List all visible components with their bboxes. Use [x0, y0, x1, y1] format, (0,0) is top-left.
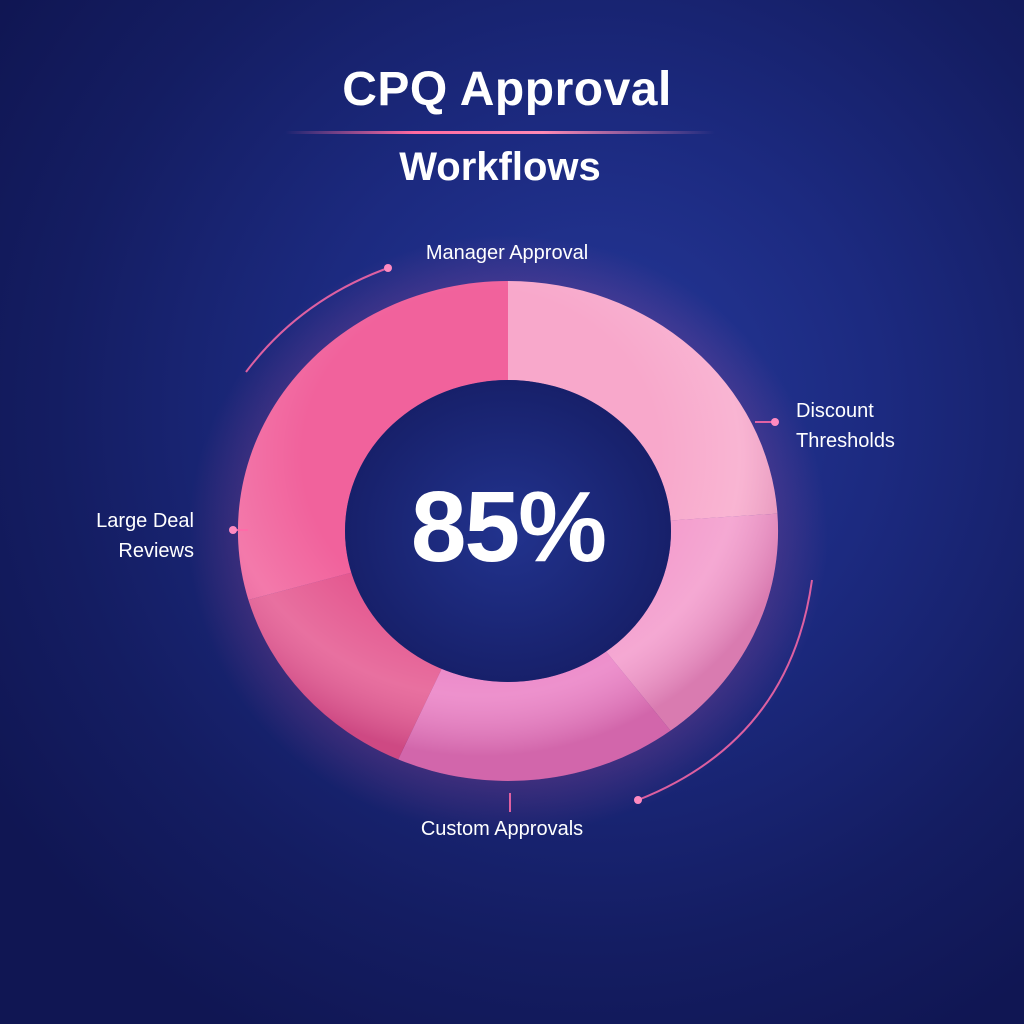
- segment: large deal reviews: [248, 573, 442, 759]
- segment: custom approvals: [398, 652, 670, 781]
- label: custom approvals: Custom Approvals: [421, 818, 583, 840]
- center value: 85%: [411, 471, 605, 583]
- label: discount thresholds: Thresholds: [796, 430, 895, 452]
- label: discount thresholds: [796, 400, 895, 452]
- label: discount thresholds: Discount: [796, 400, 874, 422]
- segment: left top: [238, 281, 508, 600]
- label: large deal reviews: Reviews: [118, 540, 194, 562]
- title: CPQ Approval: [342, 63, 672, 116]
- subtitle: Workflows: [399, 145, 601, 189]
- segment: discount thresholds: [606, 514, 778, 731]
- label: manager approval: Manager Approval: [426, 242, 588, 264]
- title underline: [285, 131, 715, 134]
- label: large deal reviews: [96, 510, 194, 562]
- label: large deal reviews: Large Deal: [96, 510, 194, 532]
- leaders: [233, 268, 812, 812]
- segment: manager approval: [508, 281, 777, 520]
